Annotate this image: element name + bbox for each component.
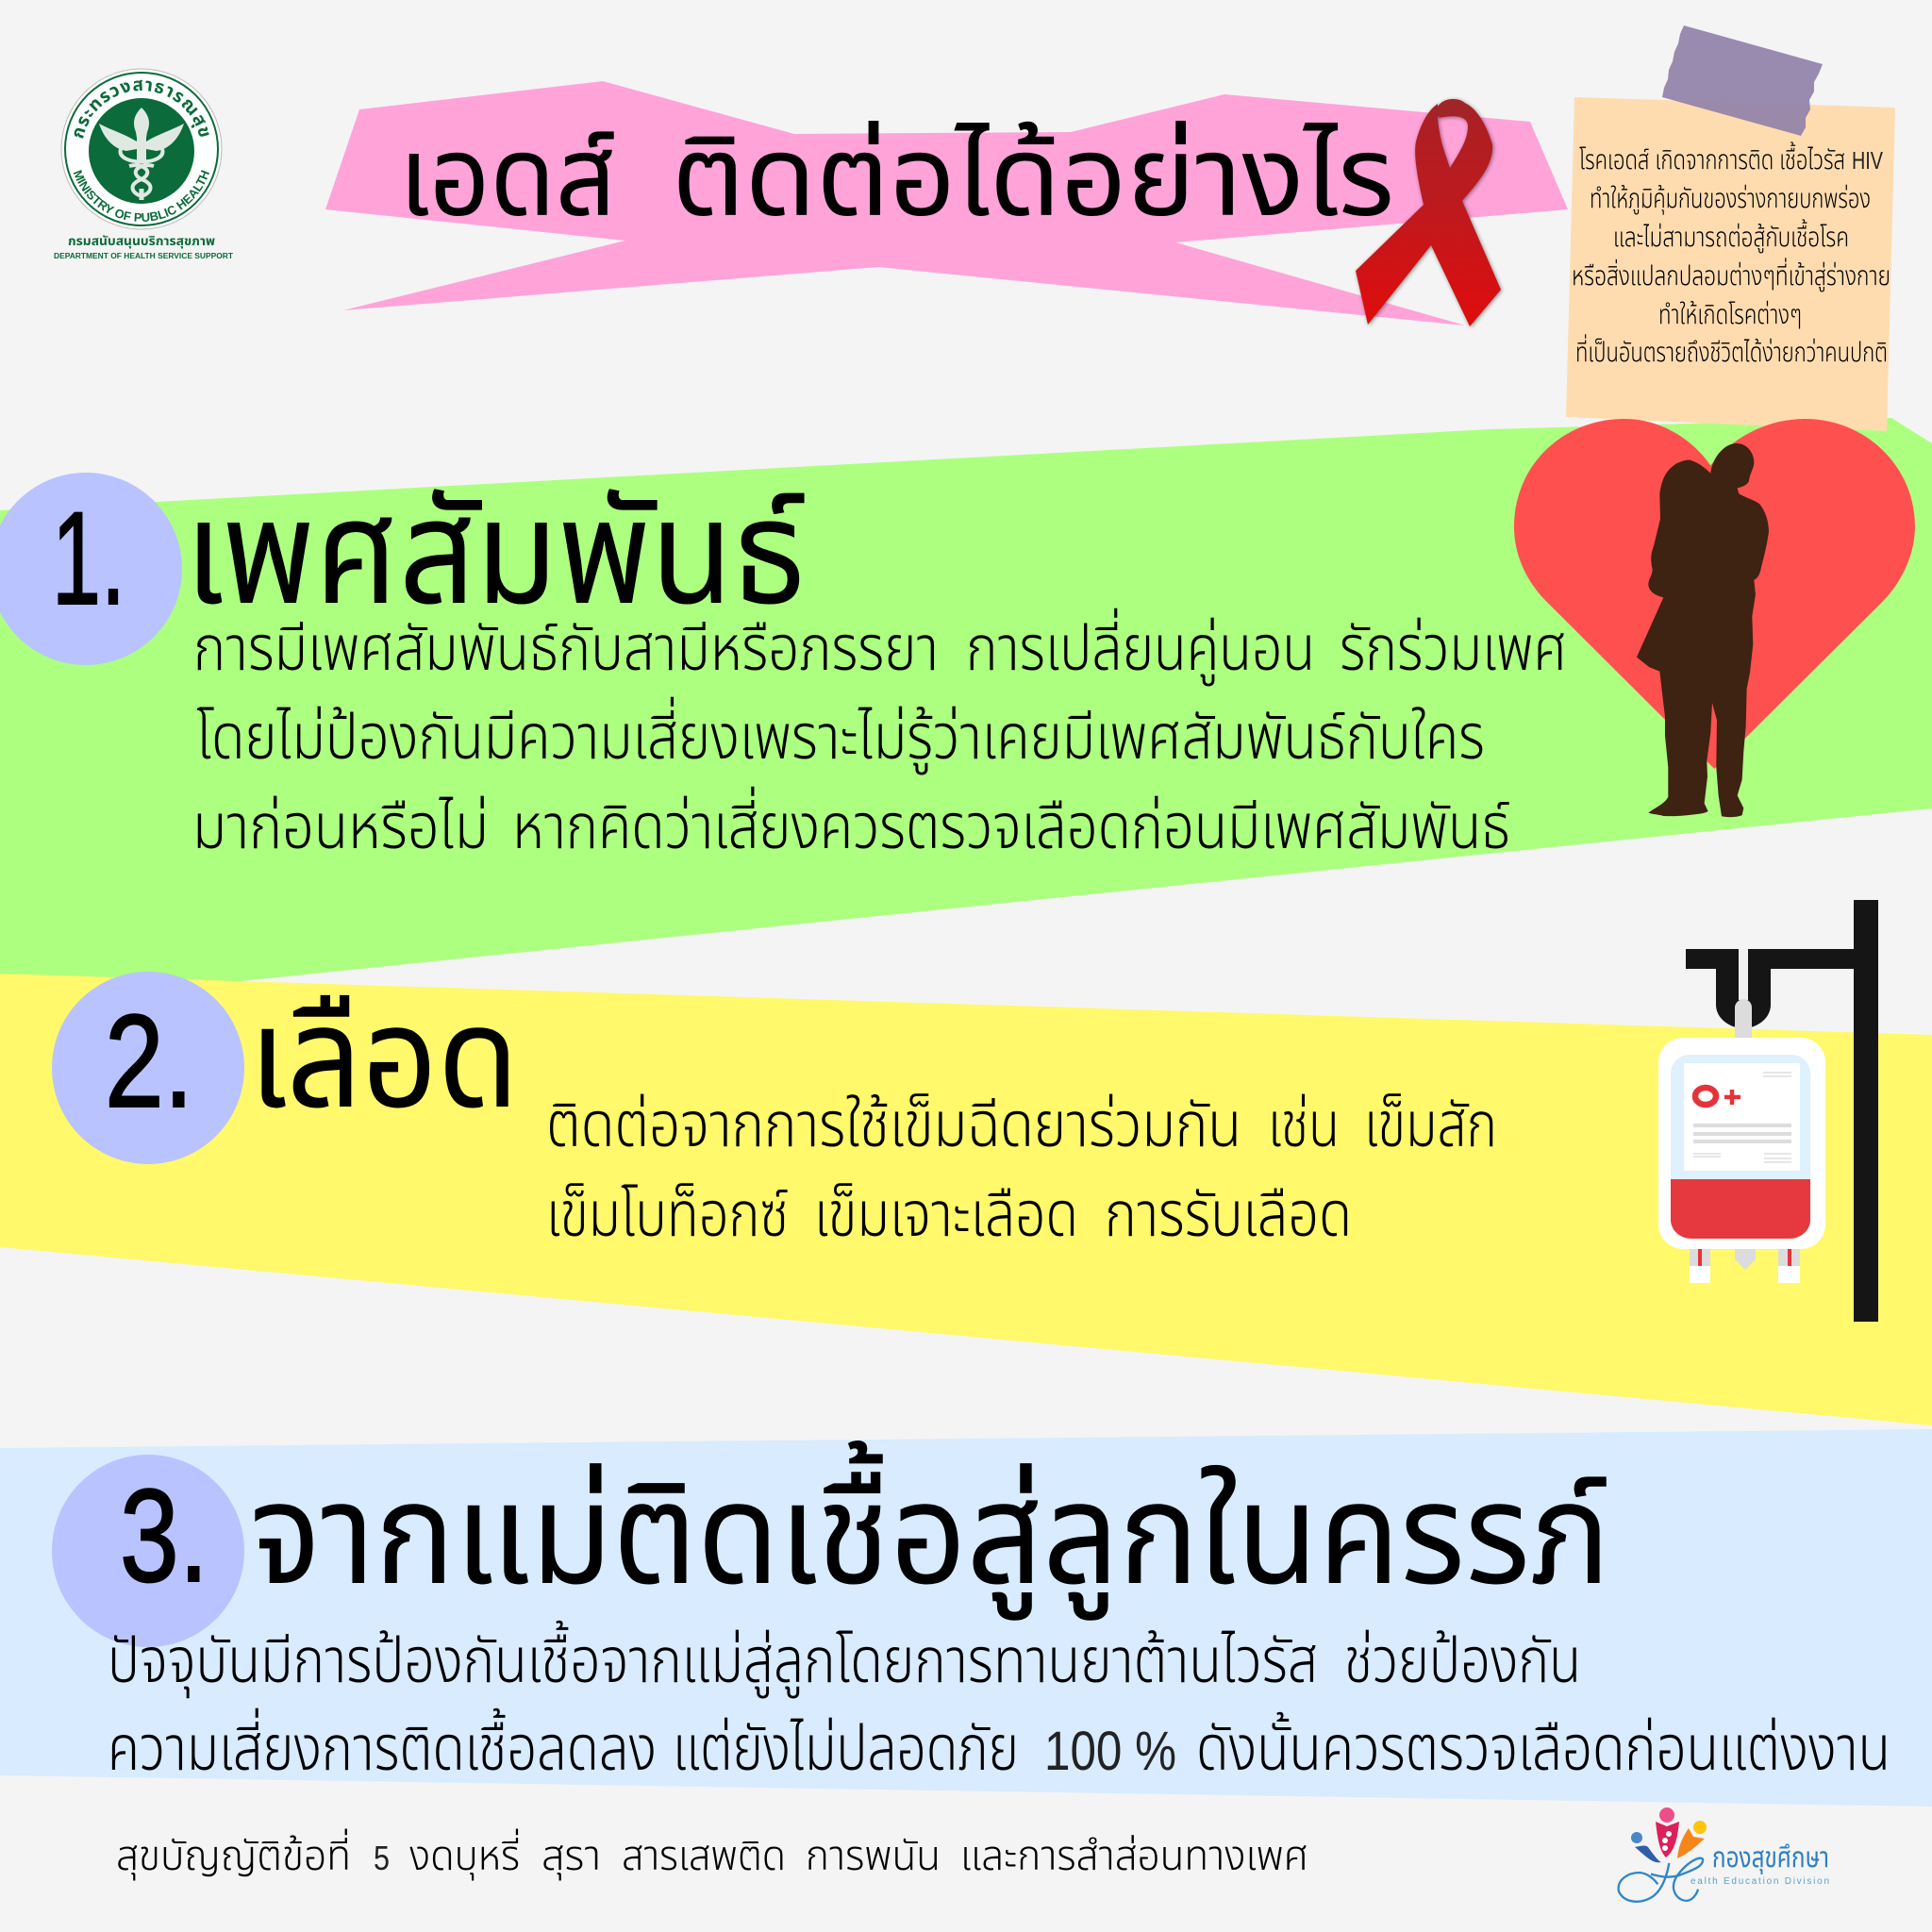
- footer text: การพนัน: [806, 1833, 941, 1879]
- body text 2: เข็มโบท็อกซ์: [546, 1179, 789, 1249]
- body text 2: ติดต่อจากการใช้เข็มฉีดยาร่วมกัน: [546, 1090, 1241, 1159]
- body text 3: ช่วยป้องกัน: [1344, 1625, 1581, 1695]
- body text 2: [546, 1090, 1497, 1249]
- number 2: 2.: [105, 987, 193, 1135]
- note text: HIV: [1852, 146, 1883, 175]
- number 3: 3.: [120, 1461, 208, 1609]
- body text 2: เข็มเจาะเลือด: [814, 1179, 1078, 1249]
- logo: Health Education Division: กองสุขศึกษา: [1712, 1842, 1829, 1874]
- number circle 2: [52, 972, 244, 1164]
- logo: Health Education Division: [1619, 1807, 1829, 1902]
- number circle 3: [52, 1455, 244, 1647]
- body text 2: การรับเลือด: [1105, 1179, 1352, 1249]
- footer text: สุรา: [541, 1833, 601, 1881]
- tape: [1662, 25, 1823, 136]
- logo: Health Education Division: ealth Education Division: [1690, 1876, 1829, 1887]
- icon: heart: [1514, 419, 1915, 769]
- heading 2: เลือด: [249, 978, 519, 1137]
- body text 2: เข็มสัก: [1364, 1090, 1497, 1159]
- note paper: [1566, 97, 1895, 431]
- note text: โรคเอดส์ เกิดจากการติด เชื้อไวรัส: [1579, 142, 1845, 175]
- footer text: 5: [374, 1839, 390, 1877]
- panel: green band sexual contact: [0, 418, 1932, 1006]
- body text 3: 100 %: [1044, 1721, 1176, 1782]
- note text: [1572, 142, 1890, 368]
- body text 2: เช่น: [1268, 1090, 1340, 1159]
- title: เอดส์: [399, 115, 616, 240]
- body text 1: หากคิดว่าเสี่ยงควรตรวจเลือดก่อนมีเพศสัมพันธ์: [512, 786, 1510, 861]
- body text 3: ความเสี่ยงการติดเชื้อลดลง: [108, 1707, 657, 1783]
- logo: Ministry of Public Health: [54, 68, 233, 260]
- note text: ทำให้เกิดโรคต่างๆ: [1658, 300, 1802, 330]
- footer text: และการสำส่อนทางเพศ: [960, 1833, 1308, 1879]
- body text 3: แต่ยังไม่ปลอดภัย: [673, 1713, 1019, 1783]
- icon: red ribbon: [1356, 99, 1501, 326]
- icon: couple silhouette: [1637, 443, 1769, 817]
- title: ติดต่อได้อย่างไร: [672, 115, 1394, 240]
- note text: และไม่สามารถต่อสู้กับเชื้อโรค: [1613, 219, 1849, 254]
- number 1: 1.: [52, 484, 125, 632]
- body text 1: [192, 608, 1567, 861]
- title banner shape: [325, 81, 1568, 325]
- logo: Ministry of Public Health: DEPARTMENT OF HEALTH SERVICE SUPPORT: [54, 252, 233, 260]
- body text 1: การเปลี่ยนคู่นอน: [966, 608, 1315, 686]
- heading 1: เพศสัมพันธ์: [185, 471, 806, 634]
- body text 3: ปัจจุบันมีการป้องกันเชื้อจากแม่สู่ลูกโดยการทานยาต้านไวรัส: [108, 1620, 1318, 1699]
- footer text: สุขบัญญัติข้อที่: [116, 1828, 351, 1881]
- footer text: [116, 1828, 1308, 1881]
- footer text: งดบุหรี่: [409, 1828, 520, 1881]
- heading 3: จากแม่ติดเชื้อสู่ลูกในครรภ์: [250, 1440, 1610, 1621]
- panel: blue band mother to child: [0, 1429, 1932, 1807]
- logo: Ministry of Public Health: กระทรวงสาธารณสุข: [74, 79, 209, 139]
- body text 1: มาก่อนหรือไม่: [192, 791, 489, 861]
- icon: blood bag on IV pole: [1658, 900, 1878, 1322]
- body text 1: โดยไม่ป้องกันมีความเสี่ยงเพราะไม่รู้ว่าเคยมีเพศสัมพันธ์กับใคร: [196, 696, 1485, 774]
- body text 3: [108, 1620, 1890, 1783]
- body text 1: รักร่วมเพศ: [1340, 613, 1567, 683]
- panel: yellow band blood: [0, 974, 1932, 1425]
- body text 1: การมีเพศสัมพันธ์กับสามีหรือภรรยา: [193, 613, 939, 683]
- number circle 1: [0, 473, 182, 665]
- logo: Ministry of Public Health: กรมสนับสนุนบริการสุขภาพ: [68, 234, 216, 248]
- footer text: สารเสพติด: [622, 1833, 786, 1879]
- logo: Ministry of Public Health: MINISTRY OF PUBLIC HEALTH: [74, 170, 209, 222]
